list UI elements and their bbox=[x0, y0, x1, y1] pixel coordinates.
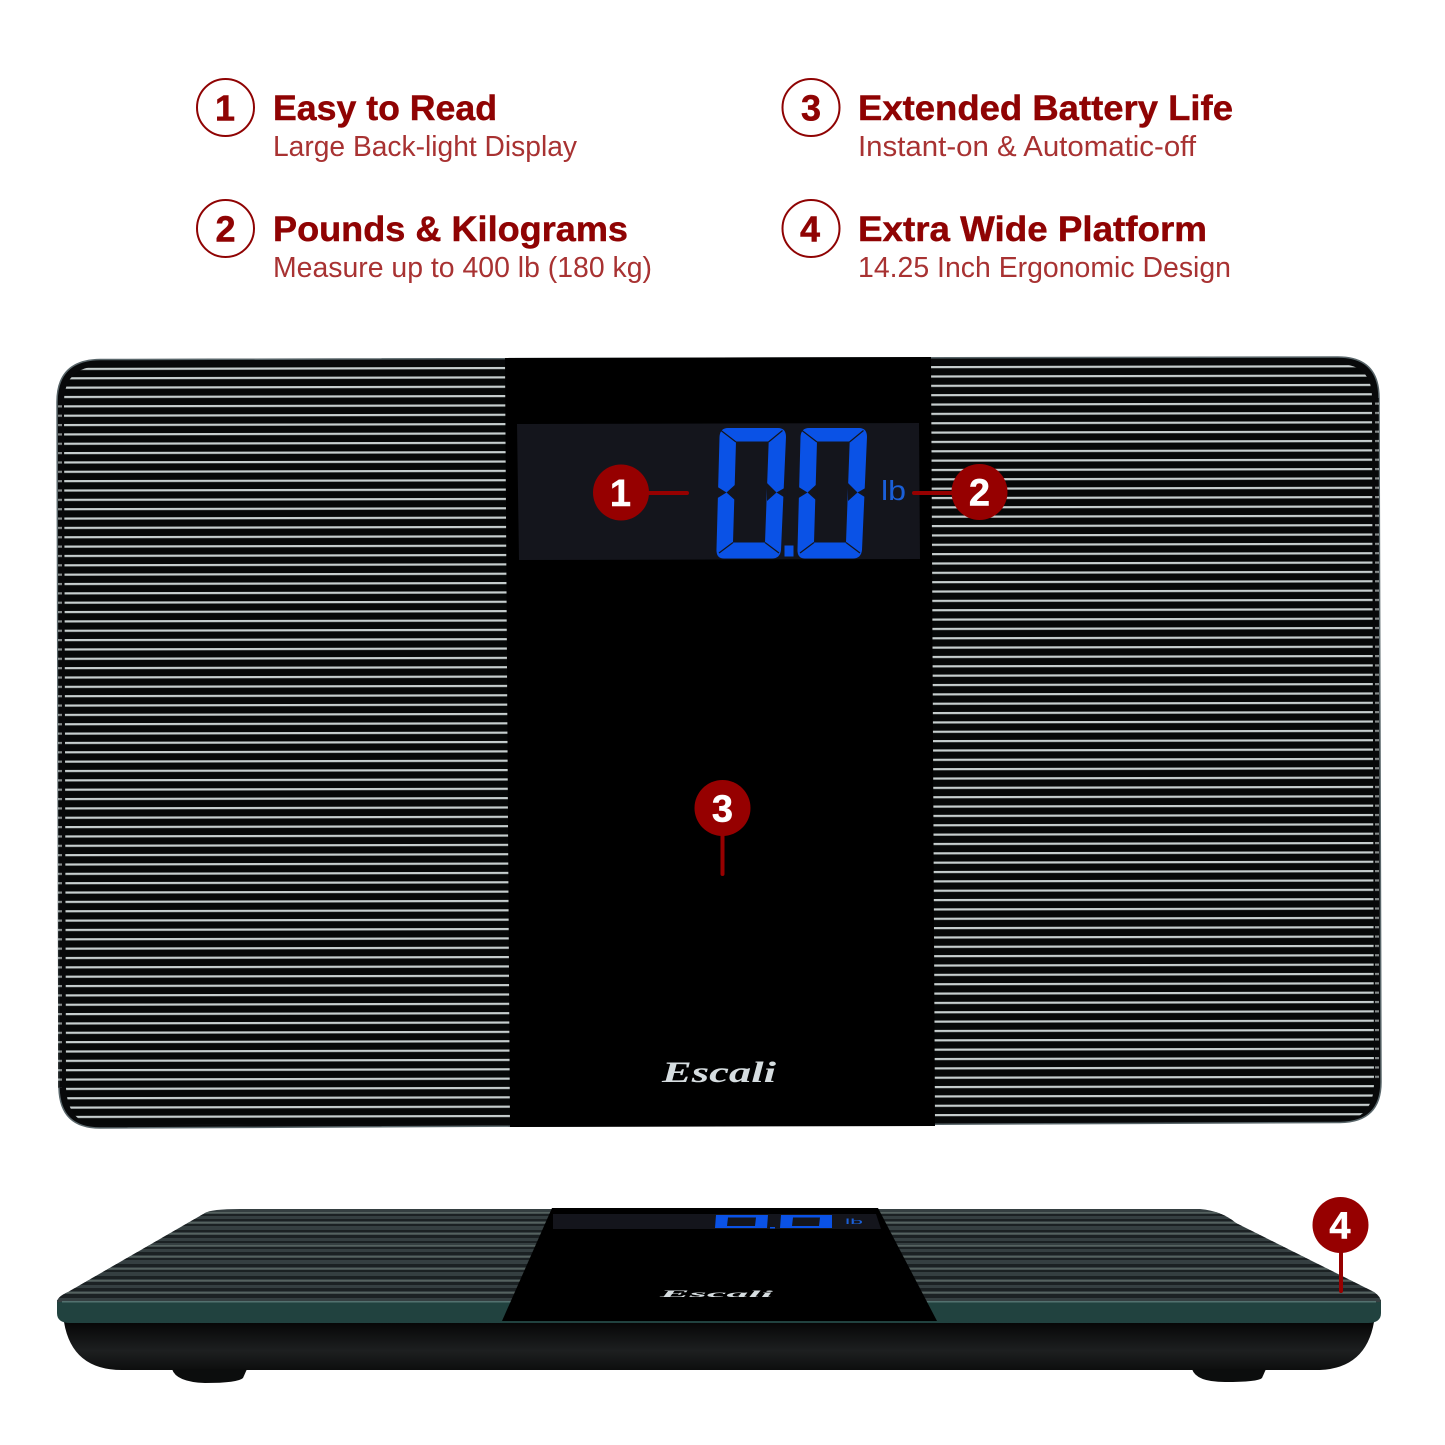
glass teal edge bbox=[57, 1300, 1381, 1323]
callout 4: 4 bbox=[1329, 1206, 1351, 1248]
glass top surface with stripes bbox=[50, 1205, 1390, 1305]
scale top view bbox=[57, 357, 1381, 1130]
heading: extra wide platform: Extra Wide Platform bbox=[858, 209, 1207, 249]
callout 3 bbox=[694, 780, 750, 874]
callout 2 bbox=[914, 464, 1008, 520]
feature 3: extended battery life bbox=[782, 79, 1233, 163]
callout 1 bbox=[593, 464, 687, 520]
mini reading 0.0 bbox=[715, 1215, 832, 1228]
badge 2: 2 bbox=[215, 208, 236, 250]
decimal point bbox=[784, 546, 794, 556]
heading: easy to read: Easy to Read bbox=[273, 88, 497, 128]
feature 4: extra wide platform bbox=[782, 200, 1231, 284]
badge 4: 4 bbox=[800, 208, 820, 250]
display window bbox=[517, 423, 920, 560]
stripes bbox=[60, 360, 1380, 1130]
display window bbox=[553, 1214, 881, 1229]
feature 1: easy to read bbox=[197, 79, 578, 163]
seven-segment reading 0.0 bbox=[716, 428, 869, 558]
right side edge stripes bbox=[1375, 398, 1379, 1082]
right foot bbox=[1192, 1369, 1266, 1382]
glass body bbox=[57, 357, 1381, 1128]
badge 3 bbox=[782, 79, 840, 136]
brand logo: Escali bbox=[661, 1056, 777, 1089]
center black panel bbox=[505, 357, 935, 1127]
badge 1 bbox=[197, 79, 254, 136]
feature 2: pounds and kilograms bbox=[197, 200, 652, 284]
heading: extended battery life: Extended Battery Life bbox=[858, 88, 1233, 128]
unit label lb: lb bbox=[881, 475, 906, 506]
base shell bbox=[64, 1322, 1374, 1370]
mini unit label: lb bbox=[845, 1219, 863, 1226]
badge 4 bbox=[782, 200, 840, 257]
subheading: ergonomic design: 14.25 Inch Ergonomic Design bbox=[858, 252, 1231, 284]
subheading: capacity: Measure up to 400 lb (180 kg) bbox=[273, 252, 652, 284]
badge 2 bbox=[197, 200, 254, 257]
second digit bbox=[797, 428, 869, 558]
badge 3: 3 bbox=[801, 88, 821, 128]
callout 4 bbox=[1312, 1197, 1368, 1291]
subheading: display: Large Back-light Display bbox=[273, 131, 578, 163]
callout 3: 3 bbox=[712, 788, 733, 830]
left side edge stripes bbox=[58, 402, 62, 1088]
first digit bbox=[716, 428, 788, 558]
heading: pounds and kilograms: Pounds & Kilograms bbox=[273, 209, 628, 249]
center black panel bbox=[502, 1208, 937, 1321]
callout 2: 2 bbox=[969, 472, 990, 514]
left foot bbox=[172, 1369, 247, 1383]
callout 1: 1 bbox=[610, 473, 631, 515]
subheading: instant-on: Instant-on & Automatic-off bbox=[858, 131, 1196, 163]
mini brand logo: Escali bbox=[658, 1288, 775, 1299]
edge highlight bbox=[62, 1301, 1376, 1302]
badge 1: 1 bbox=[215, 88, 235, 128]
scale side view bbox=[50, 1205, 1390, 1383]
